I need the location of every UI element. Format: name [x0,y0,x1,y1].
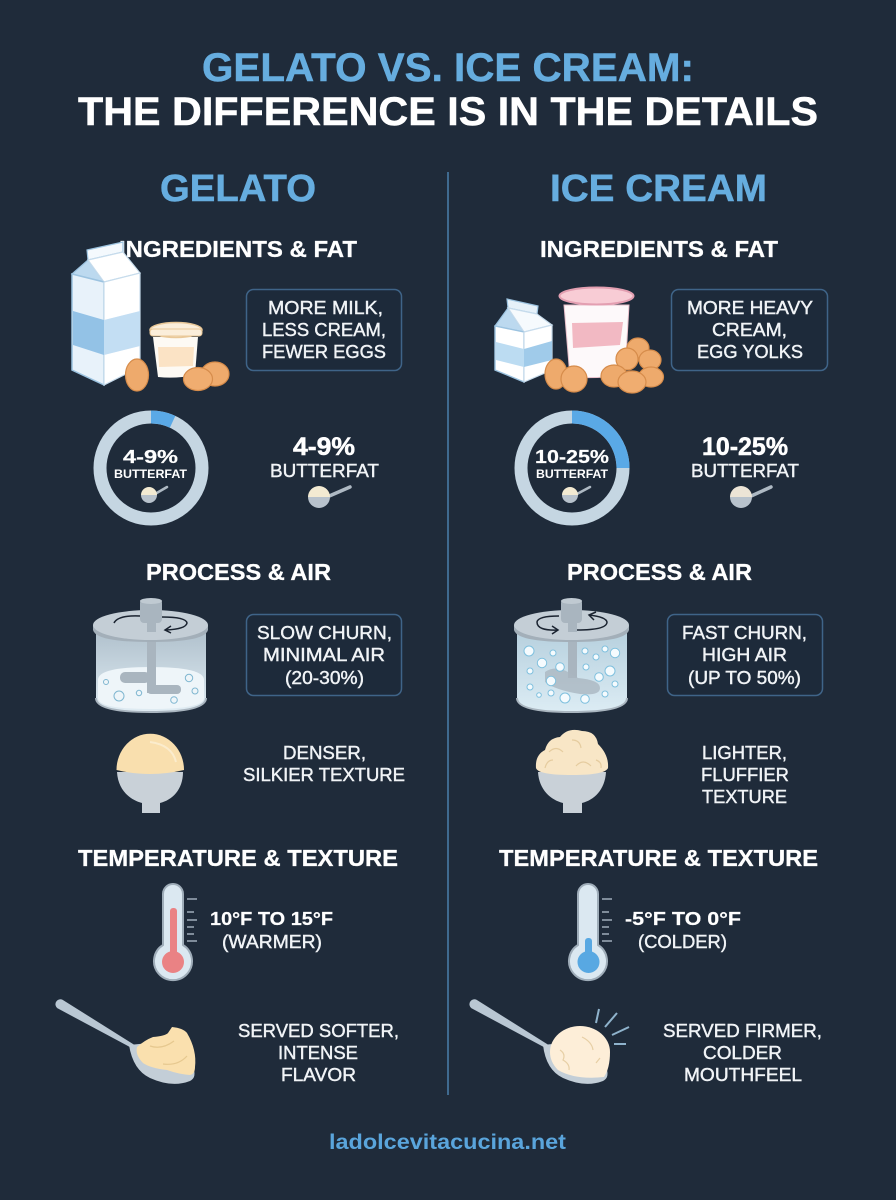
text: ice cream texture [701,743,789,807]
heading: ice cream: ICE CREAM [550,168,767,210]
chart: gelato butterfat donut [100,417,202,519]
text: gelato temperature [210,909,333,952]
chart: gelato butterfat donut: 4-9% [123,447,178,467]
icon: gelato spoon with soft serve [55,999,195,1084]
heading: gelato process and air: PROCESS & AIR [146,559,331,585]
icon: gelato dense scoop [116,734,184,813]
text: gelato serving: INTENSE [278,1043,358,1063]
heading: gelato: GELATO [160,168,316,210]
text: gelato temperature: 10°F TO 15°F [210,909,333,929]
text: gelato texture: DENSER, [283,743,366,763]
chart: gelato butterfat donut: BUTTERFAT [114,467,188,481]
icon: ice cream milk carton, tub and eggs [495,288,664,393]
text: ice cream serving: MOUTHFEEL [684,1065,802,1085]
callout: ice cream ingredients [672,290,828,370]
heading: ice cream temperature and texture: TEMPERATURE & TEXTURE [499,845,818,871]
callout: gelato ingredients: LESS CREAM, [262,320,386,340]
footer: website: ladolcevitacucina.net [329,1131,566,1154]
heading: gelato temperature and texture: TEMPERATURE & TEXTURE [78,845,398,871]
callout: ice cream ingredients: EGG YOLKS [697,342,803,362]
chart: ice cream butterfat donut [521,417,623,519]
text: ice cream temperature: -5°F TO 0°F [625,909,741,929]
title: THE DIFFERENCE IS IN THE DETAILS [78,90,818,134]
text: ice cream texture: FLUFFIER [701,765,789,785]
icon: gelato thermometer [154,884,197,980]
text: gelato serving: SERVED SOFTER, [238,1021,399,1041]
callout: gelato process [246,614,402,696]
stat: gelato butterfat: BUTTERFAT [270,461,379,481]
callout: ice cream process: FAST CHURN, [682,623,807,643]
panel: ice cream column [469,168,828,1085]
callout: gelato process: SLOW CHURN, [257,623,392,643]
panel: gelato column [55,168,405,1085]
text: ice cream temperature: (COLDER) [638,932,727,952]
icon: ice cream fast churn machine [514,598,629,712]
icon: ice cream thermometer [569,884,612,980]
stat: ice cream butterfat [691,433,799,508]
text: ice cream texture: TEXTURE [702,787,787,807]
stat: gelato butterfat: 4-9% [293,433,355,461]
callout: gelato ingredients: MORE MILK, [268,298,383,318]
heading: ice cream process and air: PROCESS & AIR [567,559,752,585]
text: ice cream serving: SERVED FIRMER, [663,1021,822,1041]
callout: ice cream ingredients: CREAM, [712,320,787,340]
heading: gelato ingredients and fat: INGREDIENTS & FAT [119,236,357,262]
stat: ice cream butterfat: BUTTERFAT [691,461,799,481]
text: gelato texture: SILKIER TEXTURE [243,765,405,785]
text: ice cream serving [663,1021,822,1085]
title [78,46,818,134]
title: GELATO VS. ICE CREAM: [202,46,694,90]
chart: ice cream butterfat donut: 10-25% [535,447,609,467]
text: ice cream temperature [625,909,741,952]
callout: gelato ingredients: FEWER EGGS [262,342,386,362]
icon: ice cream spoon with firm scoop [469,999,629,1084]
callout: gelato process: (20-30%) [285,668,364,688]
text: gelato serving [238,1021,399,1085]
text: ice cream serving: COLDER [703,1043,782,1063]
icon: gelato slow churn machine [93,598,208,712]
heading: ice cream ingredients and fat: INGREDIENTS & FAT [540,236,778,262]
text: gelato temperature: (WARMER) [222,932,322,952]
callout: ice cream process: (UP TO 50%) [688,668,801,688]
callout: gelato process: MINIMAL AIR [263,645,385,665]
text: ice cream texture: LIGHTER, [702,743,787,763]
callout: ice cream process: HIGH AIR [702,645,787,665]
stat: gelato butterfat [270,433,379,508]
stat: ice cream butterfat: 10-25% [702,433,788,461]
callout: ice cream ingredients: MORE HEAVY [687,298,813,318]
callout: ice cream process [668,614,822,696]
chart: ice cream butterfat donut: BUTTERFAT [536,467,609,481]
callout: gelato ingredients [246,290,402,370]
text: gelato serving: FLAVOR [281,1065,356,1085]
icon: ice cream fluffy scoop [536,730,608,813]
icon: gelato milk carton, cup and eggs [72,242,229,391]
text: gelato texture [243,743,405,785]
